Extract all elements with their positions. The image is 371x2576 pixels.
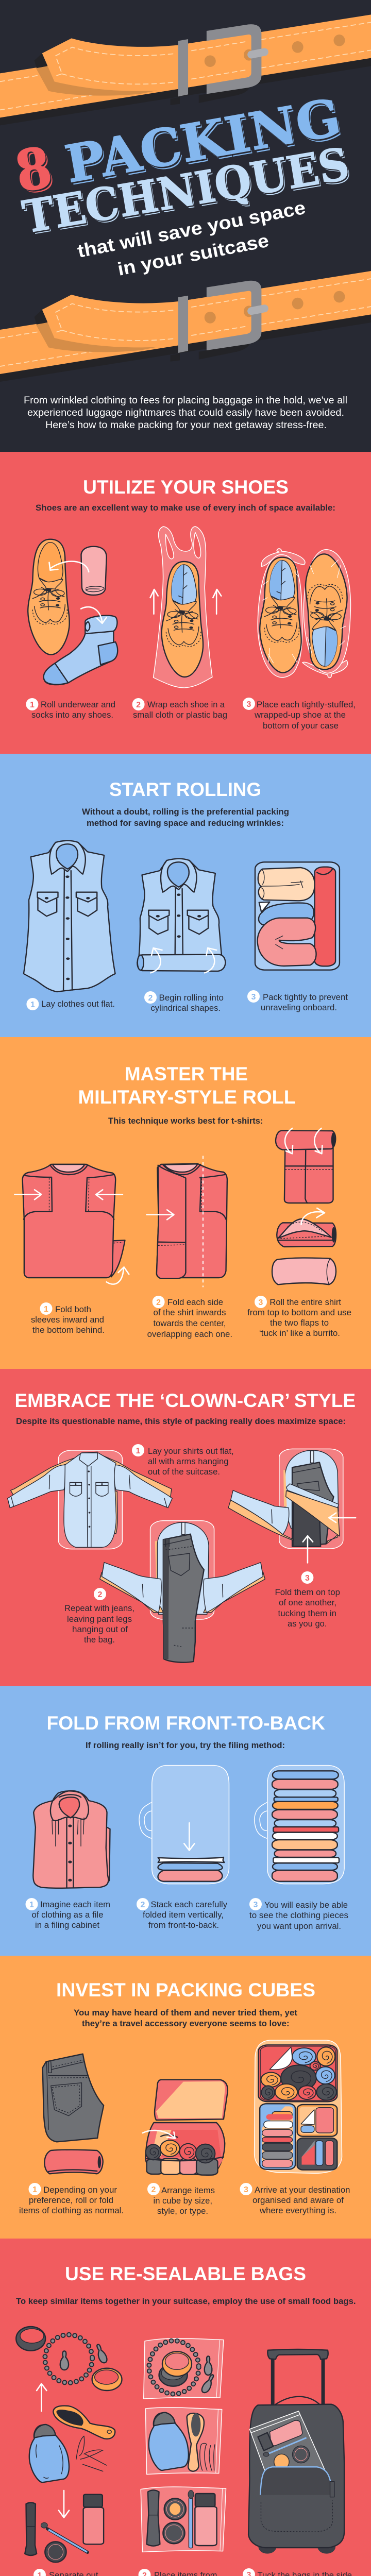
step captions: out of the suitcase.: [148, 1467, 220, 1477]
illustration: case packed with stacked clothes: [255, 1766, 344, 1884]
title word packing: PACKING: [63, 90, 347, 197]
illustration: jeans and rolled clothing: [43, 2054, 104, 2174]
step captions: [19, 2183, 350, 2216]
title word techniques: TECHNIQUES: [20, 139, 354, 245]
heading: INVEST IN PACKING CUBES: [56, 1979, 315, 2001]
illustration: rolled clothes in case: [255, 862, 340, 970]
step captions: Wrap each shoe in a: [147, 700, 225, 709]
illustration: jeans over shirt: [100, 1521, 265, 1663]
step captions: folded item vertically,: [143, 1910, 224, 1920]
step captions: 2: [136, 701, 141, 709]
step captions: 1: [136, 1447, 141, 1455]
step captions: 2: [156, 1298, 161, 1307]
step captions: Stack each carefully: [150, 1900, 228, 1909]
title number 8: 8: [11, 135, 56, 205]
step captions: 3: [305, 1574, 310, 1583]
heading: MASTER THE: [125, 1063, 248, 1084]
step captions: preference, roll or fold: [29, 2196, 113, 2205]
step captions: Arrange items: [161, 2186, 215, 2195]
step captions: Roll the entire shirt: [269, 1298, 341, 1307]
step captions: socks into any shoes.: [31, 710, 113, 720]
panel: dark header: [0, 0, 371, 452]
title word packing: PACKING: [62, 89, 346, 196]
step captions: [26, 990, 348, 1013]
intro lines: [74, 2008, 297, 2028]
step captions: the bottom behind.: [32, 1326, 105, 1335]
step captions: hanging out of: [72, 1625, 128, 1634]
intro lines: Without a doubt, rolling is the preferential packing: [82, 807, 289, 817]
step captions: Depending on your: [43, 2185, 117, 2195]
illustration: shirt in suitcase: [8, 1450, 172, 1549]
heading: FOLD FROM FRONT-TO-BACK: [46, 1713, 325, 1734]
step captions: of the shirt inwards: [154, 1308, 226, 1317]
step captions: style, or type.: [157, 2207, 208, 2216]
illustration: shoe in plastic bag: [150, 527, 221, 688]
illustration: organised suitcase of cubes: [255, 2040, 342, 2173]
step captions: of one another,: [279, 1598, 336, 1607]
step captions: 1: [30, 1001, 35, 1009]
illustration: vest being rolled: [137, 858, 226, 974]
step captions: of clothing as a file: [32, 1910, 103, 1920]
step captions: Imagine each item: [40, 1900, 110, 1909]
panel: fold front-to-back: [0, 1686, 371, 1956]
step captions: 1: [32, 2185, 37, 2194]
intro lines: [82, 807, 289, 828]
title number 8: 8: [13, 138, 59, 208]
step captions: towards the center,: [154, 1319, 226, 1328]
illustration: shirt sleeves folded: [14, 1164, 129, 1284]
step captions: small cloth or plastic bag: [133, 710, 227, 720]
subtitle: in your suitcase: [116, 230, 271, 280]
step captions: from top to bottom and use: [247, 1308, 351, 1317]
illustration: shoe, underwear and sock: [28, 539, 117, 685]
illustration: open cube: [143, 2080, 228, 2175]
step captions: 2: [98, 1590, 103, 1599]
illustration: flat vest: [24, 841, 115, 992]
title: [11, 87, 355, 246]
step captions: 3: [244, 2185, 248, 2194]
illustration: items sorted into zip bags: [141, 2338, 226, 2552]
step captions: You will easily be able: [264, 1901, 348, 1910]
intro text: [24, 395, 347, 431]
step captions: Place each tightly-stuffed,: [257, 700, 356, 709]
step captions: Fold both: [55, 1305, 91, 1314]
step captions: [31, 1296, 351, 1339]
step captions: where everything is.: [259, 2206, 336, 2215]
intro text: Here’s how to make packing for your next getaway stress-free.: [45, 419, 327, 431]
heading: EMBRACE THE ‘CLOWN-CAR’ STYLE: [14, 1390, 356, 1411]
illustration: stacking clothes in case: [139, 1766, 229, 1884]
intro lines: You may have heard of them and never tried them, yet: [74, 2008, 297, 2018]
step captions: 2: [151, 2185, 156, 2194]
step captions: the two flaps to: [270, 1318, 329, 1328]
step captions: [26, 1898, 348, 1931]
intro line: Despite its questionable name, this style of packing really does maximize space:: [16, 1416, 346, 1426]
step captions: items of clothing as normal.: [19, 2206, 124, 2215]
step captions: 3: [254, 1901, 258, 1909]
step captions: wrapped-up shoe at the: [254, 710, 346, 720]
heading: START ROLLING: [109, 779, 261, 800]
heading: [78, 1063, 296, 1108]
step captions: Arrive at your destination: [255, 2185, 350, 2195]
illustration: wrapped shoes in case: [258, 549, 351, 677]
title word techniques: TECHNIQUES: [19, 138, 353, 244]
step captions: 3: [259, 1298, 263, 1307]
step captions: Lay clothes out flat.: [41, 999, 115, 1009]
intro line: This technique works best for t-shirts:: [108, 1116, 263, 1126]
intro line: To keep similar items together in your suitcase, employ the use of small food bags.: [16, 2296, 356, 2306]
intro text: experienced luggage nightmares that could easily have been avoided.: [27, 407, 344, 418]
panel: packing cubes: [0, 1956, 371, 2239]
step captions: tucking them in: [278, 1609, 336, 1618]
step captions: Lay your shirts out flat,: [148, 1447, 234, 1456]
step captions: from front-to-back.: [148, 1921, 219, 1930]
step captions: 1: [29, 1901, 34, 1909]
step captions: unraveling onboard.: [261, 1003, 337, 1012]
step captions: Pack tightly to prevent: [263, 993, 348, 1002]
panel: start rolling: [0, 754, 371, 1037]
step captions: 2: [141, 1901, 145, 1909]
illustration: shirt folded over jeans: [228, 1449, 356, 1563]
step captions: Begin rolling into: [159, 993, 224, 1003]
step captions: [26, 698, 356, 731]
intro lines: method for saving space and reducing wrinkles:: [87, 818, 284, 828]
step captions: ‘tuck in’ like a burrito.: [259, 1329, 340, 1338]
step captions: [64, 1444, 340, 1645]
belt illustration lower: [0, 271, 371, 382]
step captions: as you go.: [288, 1619, 327, 1629]
heading: MILITARY-STYLE ROLL: [78, 1087, 296, 1108]
illustration: shirt rolled into burrito: [272, 1128, 336, 1284]
title number 8: 8: [12, 136, 58, 206]
step captions: overlapping each one.: [147, 1330, 232, 1339]
subtitle: that will save you space: [76, 197, 307, 262]
step captions: you want upon arrival.: [257, 1922, 341, 1931]
panel: military-style roll: [0, 1037, 371, 1369]
illustration: shirt as a file: [33, 1791, 110, 1888]
intro line: Shoes are an excellent way to make use of every inch of space available:: [36, 503, 335, 513]
step captions: Repeat with jeans,: [64, 1604, 134, 1613]
heading: USE RE-SEALABLE BAGS: [65, 2263, 306, 2284]
heading: UTILIZE YOUR SHOES: [83, 477, 289, 498]
step captions: 3: [247, 700, 251, 709]
step captions: Roll underwear and: [41, 700, 115, 709]
step captions: 2: [148, 994, 153, 1003]
step captions: [23, 2568, 353, 2576]
step captions: cylindrical shapes.: [150, 1004, 221, 1013]
step captions: to see the clothing pieces: [249, 1911, 348, 1920]
step captions: bottom of your case: [263, 721, 339, 731]
title word packing: PACKING: [61, 88, 345, 195]
intro lines: they’re a travel accessory everyone seems to love:: [82, 2019, 290, 2028]
step captions: leaving pant legs: [67, 1615, 132, 1624]
illustration: accessories, hair products and cosmetics: [16, 2327, 122, 2562]
panel: utilize your shoes: [0, 452, 371, 754]
intro text: From wrinkled clothing to fees for placing baggage in the hold, we've all: [24, 395, 347, 406]
belt illustration top: [0, 14, 371, 125]
step captions: 1: [30, 701, 35, 709]
illustration: shirt sides folded: [147, 1156, 227, 1287]
step captions: all with arms hanging: [148, 1457, 229, 1466]
step captions: 3: [251, 993, 256, 1002]
step captions: Fold each side: [167, 1298, 223, 1307]
step captions: 1: [44, 1305, 48, 1314]
step captions: Fold them on top: [275, 1588, 340, 1597]
intro line: If rolling really isn’t for you, try the filing method:: [86, 1740, 285, 1750]
panel: re-sealable bags: [0, 2239, 371, 2576]
step captions: in cube by size,: [154, 2196, 212, 2206]
illustration: suitcase with zip bag in pocket: [248, 2349, 344, 2554]
step captions: the bag.: [84, 1635, 115, 1645]
step captions: organised and aware of: [252, 2196, 344, 2205]
subtitle: [76, 197, 307, 280]
step captions: in a filing cabinet: [35, 1921, 99, 1930]
panel: clown-car style: [0, 1369, 371, 1686]
step captions: sleeves inward and: [31, 1315, 104, 1325]
title word techniques: TECHNIQUES: [21, 140, 355, 246]
